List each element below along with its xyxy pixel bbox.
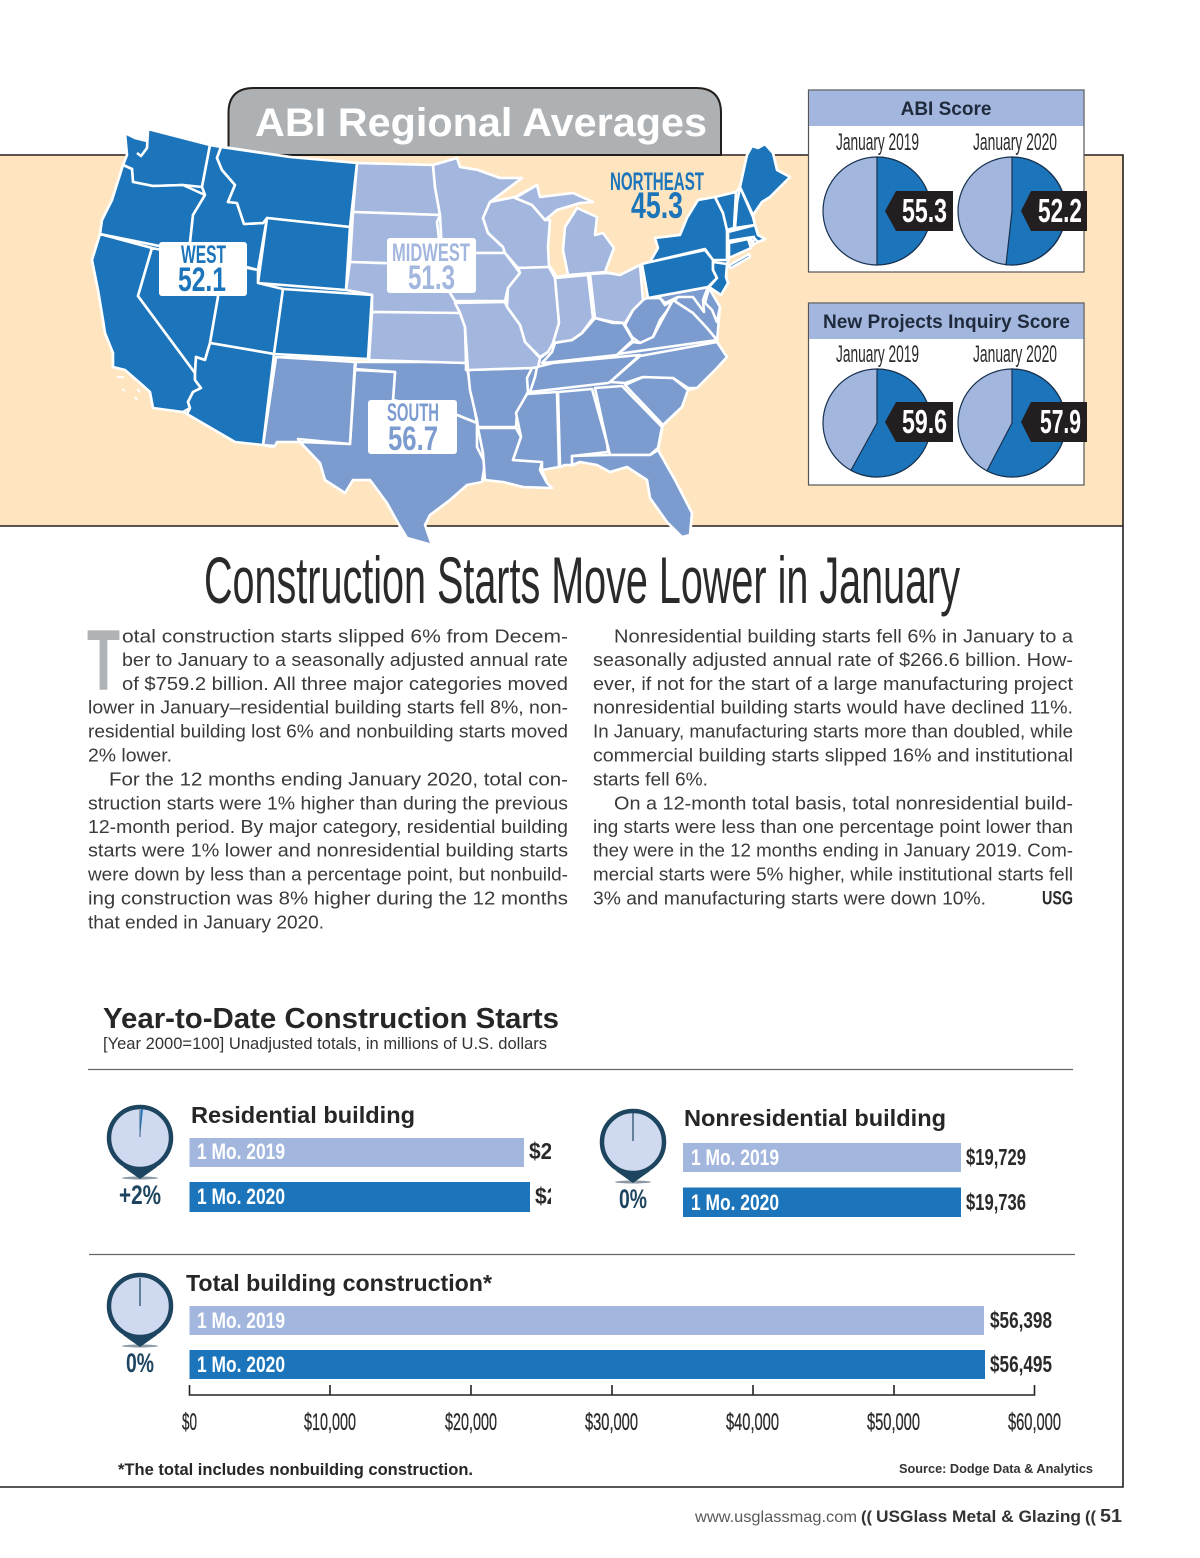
panel: New Projects Inquiry Score: New Projects Inquiry Score: [823, 312, 1070, 333]
bar: 1 Mo. 2019: 1 Mo. 2019: [197, 1139, 285, 1164]
tag: 57.9: [1021, 402, 1087, 442]
bar: 1 Mo. 2020: $23: [535, 1183, 570, 1209]
tab: ABI Regional Averages heading: [228, 88, 721, 155]
chart: residential building: Residential building: [191, 1102, 415, 1128]
axis: [182, 1385, 1061, 1436]
tag: 59.6: [885, 402, 953, 442]
article column 1: struction starts were 1% higher than during the previous: [88, 792, 568, 814]
chart: residential building: [109, 1102, 570, 1212]
article column 2: they were in the 12 months ending in January 2019. Com-: [593, 840, 1073, 860]
axis: $30,000: [585, 1409, 638, 1436]
region: south states: [263, 287, 727, 545]
chart: total building construction: Total building construction*: [186, 1270, 492, 1296]
axis: $60,000: [1008, 1409, 1061, 1436]
chart: total building construction: [109, 1270, 1052, 1379]
chart: nonresidential building: [602, 1105, 1026, 1217]
label: northeast 45.3: NORTHEAST: [610, 168, 704, 196]
pie: January 2020: [958, 369, 1066, 477]
panel: New Projects Inquiry Score: January 2020: [973, 341, 1057, 368]
chart: nonresidential building: Nonresidential building: [684, 1105, 946, 1131]
gauge: total 0%: 0%: [126, 1348, 154, 1378]
page footer: ((: [861, 1509, 873, 1526]
bar: 1 Mo. 2020: 1 Mo. 2020: [691, 1190, 779, 1215]
region: west states: [92, 129, 372, 445]
tag: 52.2: [1021, 191, 1087, 231]
article column 1: lower in January–residential building starts fell 8%, non-: [88, 696, 568, 718]
gauge: nonresidential 0%: [602, 1111, 664, 1214]
bar: 1 Mo. 2019: $56,398: [990, 1307, 1052, 1333]
bar: 1 Mo. 2019: [190, 1306, 1052, 1335]
article column 1: 2% lower.: [88, 744, 172, 766]
article column 2: Nonresidential building starts fell 6% in January to a: [614, 626, 1074, 646]
article column 1: 12-month period. By major category, residential building: [88, 816, 568, 837]
article column 2: starts fell 6%.: [593, 768, 708, 790]
label: midwest 51.3: 51.3: [408, 259, 455, 297]
article column 2: On a 12-month total basis, total nonresidential build-: [614, 792, 1073, 814]
peach map banner: [0, 155, 1123, 526]
article column 2: ever, if not for the start of a large manufacturing project: [593, 673, 1073, 694]
panel: ABI score: January 2019: [836, 129, 919, 156]
pie: January 2019: [823, 157, 931, 265]
article column 1: For the 12 months ending January 2020, total con-: [109, 768, 568, 790]
gauge: nonresidential 0%: 0%: [619, 1184, 647, 1214]
article column 1: of $759.2 billion. All three major categories moved: [122, 673, 568, 694]
tag: 57.9: 57.9: [1040, 403, 1081, 440]
bar: 1 Mo. 2020: [683, 1188, 1026, 1217]
panel: New Projects Inquiry Score: January 2019: [836, 341, 919, 368]
bar: 1 Mo. 2020: [190, 1182, 570, 1212]
bar: 1 Mo. 2019: 1 Mo. 2019: [197, 1308, 285, 1333]
region: northeast states: [642, 144, 790, 298]
bar: 1 Mo. 2019: [683, 1143, 1026, 1172]
bar: 1 Mo. 2020: 1 Mo. 2020: [197, 1352, 285, 1377]
article column 1: were down by less than a percentage point, but nonbuild-: [87, 864, 568, 884]
label: south 56.7: SOUTH: [387, 399, 439, 427]
label: midwest 51.3: [387, 238, 476, 297]
gauge: total 0%: [109, 1275, 171, 1378]
label: south 56.7: 56.7: [388, 420, 438, 458]
footnote: *The total includes nonbuilding construction.: [118, 1461, 473, 1479]
tag: 52.2: 52.2: [1038, 192, 1082, 229]
page footer: ((: [1085, 1509, 1097, 1526]
page footer: USGlass Metal & Glazing: [876, 1507, 1081, 1526]
bar: 1 Mo. 2019: 1 Mo. 2019: [691, 1145, 779, 1170]
article column 1: ing construction was 8% higher during the 12 months: [88, 888, 568, 908]
label: west 52.1: [159, 241, 247, 299]
axis: $0: [182, 1409, 197, 1436]
bar: 1 Mo. 2020: 1 Mo. 2020: [197, 1184, 285, 1209]
drop cap T: T: [87, 613, 120, 709]
chart heading: Year-to-Date Construction Starts: [103, 1003, 559, 1035]
tab: ABI Regional Averages heading: ABI Regional Averages: [255, 101, 707, 145]
article column 2: nonresidential building starts would have declined 11%.: [593, 696, 1073, 718]
label: south 56.7: [368, 399, 457, 458]
article column 2: ing starts were less than one percentage point lower than: [593, 816, 1073, 837]
pie: January 2020: [958, 157, 1066, 265]
page footer: www.usglassmag.com: [694, 1509, 857, 1526]
article column 2: 3% and manufacturing starts were down 10%.: [593, 888, 986, 908]
tag: 59.6: 59.6: [902, 403, 947, 440]
label: northeast 45.3: [610, 168, 704, 226]
pie: January 2019: [823, 369, 931, 477]
article column 1: starts were 1% lower and nonresidential building starts: [88, 840, 568, 860]
page footer: [694, 1506, 1122, 1526]
label: midwest 51.3: MIDWEST: [392, 239, 470, 267]
map of US regions: [92, 129, 790, 545]
article column 1: ber to January to a seasonally adjusted annual rate: [122, 649, 568, 670]
gauge: residential +2%: +2%: [119, 1180, 161, 1210]
axis: $40,000: [726, 1409, 779, 1436]
bar: 1 Mo. 2020: $56,495: [990, 1351, 1052, 1377]
article column 2: commercial building starts slipped 16% and institutional: [593, 744, 1073, 766]
bar: 1 Mo. 2019: $23: [529, 1138, 564, 1164]
article column 2: mercial starts were 5% higher, while institutional starts fell: [593, 864, 1073, 884]
bar: 1 Mo. 2020: [190, 1350, 1052, 1379]
article column 1: [87, 626, 568, 932]
region: midwest states: [346, 158, 643, 370]
chart heading: [Year 2000=100] Unadjusted totals, in millions of U.S. dollars: [103, 1035, 547, 1053]
article column 2: USG: [1042, 888, 1073, 910]
tag: 55.3: 55.3: [902, 192, 947, 229]
panel: ABI score: ABI Score: [901, 99, 991, 120]
chart heading: [103, 1003, 559, 1053]
label: northeast 45.3: 45.3: [631, 185, 683, 226]
label: west 52.1: WEST: [181, 241, 226, 269]
source note: Source: Dodge Data & Analytics: [899, 1462, 1093, 1476]
axis: $50,000: [867, 1409, 920, 1436]
tag: 55.3: [885, 191, 953, 231]
axis: $20,000: [445, 1409, 497, 1436]
label: west 52.1: 52.1: [178, 261, 226, 299]
bar: 1 Mo. 2019: [190, 1138, 564, 1167]
article column 1: residential building lost 6% and nonbuilding starts moved: [88, 720, 568, 742]
panel: ABI score: [808, 90, 1087, 272]
bar: 1 Mo. 2019: $19,729: [966, 1144, 1026, 1170]
article column 2: [593, 626, 1074, 910]
article column 1: otal construction starts slipped 6% from Decem-: [122, 626, 568, 646]
page footer: 51: [1100, 1506, 1122, 1526]
panel: ABI score: January 2020: [973, 129, 1057, 156]
bar: 1 Mo. 2020: $19,736: [966, 1189, 1026, 1215]
panel: New Projects Inquiry Score: [808, 303, 1087, 485]
article column 1: that ended in January 2020.: [88, 912, 324, 932]
article column 2: In January, manufacturing starts more than doubled, while: [593, 720, 1073, 742]
gauge: residential +2%: [109, 1107, 171, 1210]
axis: $10,000: [304, 1409, 356, 1436]
article column 2: seasonally adjusted annual rate of $266.6 billion. How-: [593, 649, 1073, 670]
